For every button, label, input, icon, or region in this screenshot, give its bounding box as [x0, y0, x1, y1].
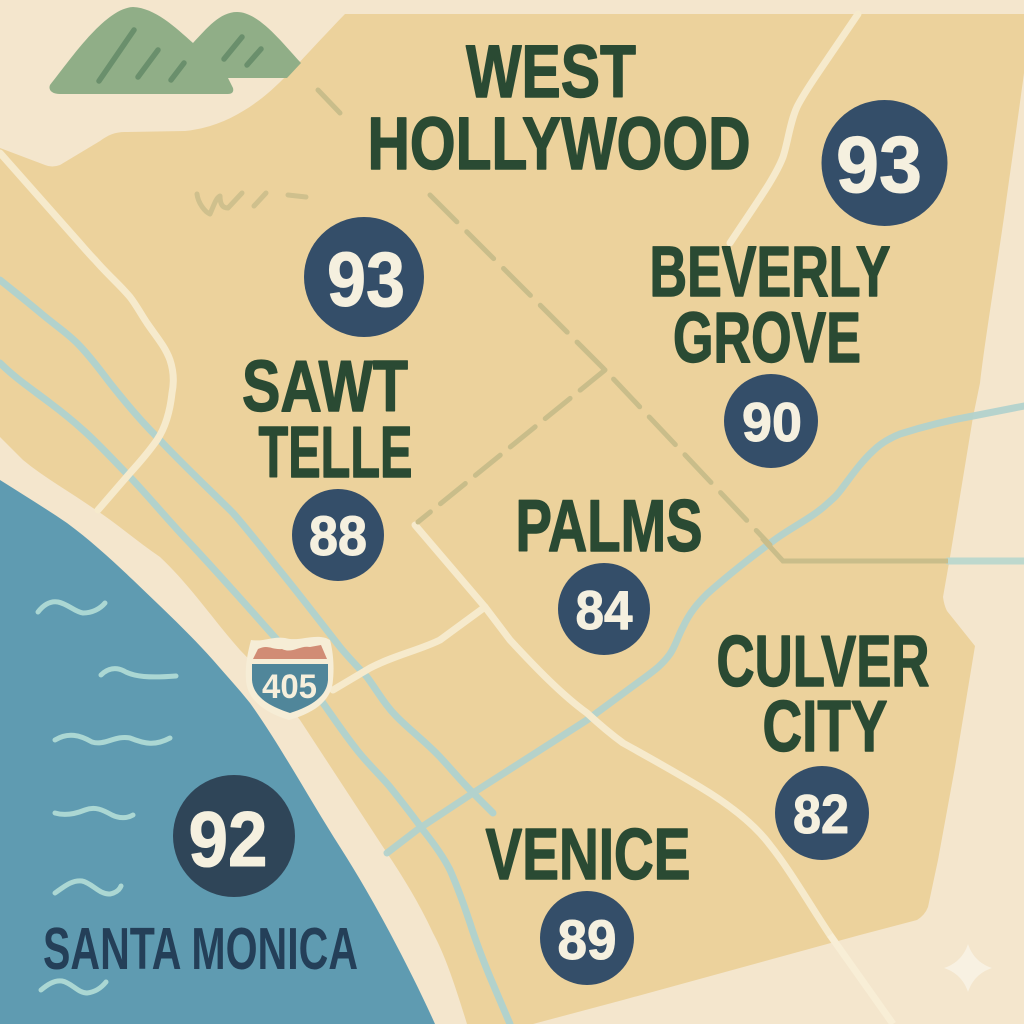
label: Culver City — [716, 622, 930, 767]
ocean — [0, 480, 435, 1024]
badge: Palms 84 — [558, 563, 650, 655]
label: Palms: PALMS — [516, 486, 702, 567]
rivers and canals — [0, 280, 1024, 1024]
label: Culver City: CULVER — [716, 622, 930, 702]
ocean waves — [38, 602, 176, 993]
label: Beverly Grove: GROVE — [673, 299, 861, 378]
badge: Venice 89 — [540, 891, 634, 985]
label: Beverly Grove — [650, 233, 890, 378]
badge: Palms 84: 84 — [576, 579, 633, 641]
roads: cream streets — [0, 14, 858, 935]
badge: Sawtelle 93: 93 — [327, 237, 405, 323]
label: Santa Monica: SANTA MONICA — [43, 916, 358, 982]
label: West Hollywood: HOLLYWOOD — [368, 102, 750, 185]
badge: Beverly Grove 90 — [724, 374, 818, 468]
badge: Sawtelle 88 — [292, 489, 384, 581]
badge: Venice 89: 89 — [558, 908, 616, 971]
road segment on sand — [830, 935, 893, 1024]
label: Sawtelle — [242, 347, 412, 493]
label: Sawtelle: SAWT — [242, 347, 408, 427]
badge: West Hollywood 93: 93 — [836, 120, 922, 209]
mountains — [49, 7, 301, 94]
label: Beverly Grove: BEVERLY — [650, 233, 890, 312]
label: Culver City: CITY — [762, 687, 888, 767]
badge: Culver City 82: 82 — [793, 783, 849, 845]
badge: Beverly Grove 90: 90 — [742, 391, 802, 453]
badge: West Hollywood 93 — [822, 100, 948, 226]
label: Venice: VENICE — [486, 815, 690, 895]
icon: sparkle — [944, 944, 992, 992]
label: West Hollywood — [368, 30, 750, 185]
label: Sawtelle: TELLE — [258, 413, 412, 493]
badge: Santa Monica 92 — [173, 775, 295, 897]
badge: Culver City 82 — [775, 766, 869, 860]
faint scribble marks — [197, 193, 306, 214]
badge: Sawtelle 88: 88 — [309, 504, 367, 567]
interstate 405 shield: 405 — [262, 668, 317, 706]
boundary solid line east — [762, 538, 948, 561]
interstate 405 shield — [246, 637, 334, 720]
neighborhood boundaries: dashed lines — [318, 90, 770, 545]
label: West Hollywood: WEST — [466, 30, 636, 113]
badge: Sawtelle 93 — [304, 217, 424, 337]
badge: Santa Monica 92: 92 — [188, 795, 268, 883]
